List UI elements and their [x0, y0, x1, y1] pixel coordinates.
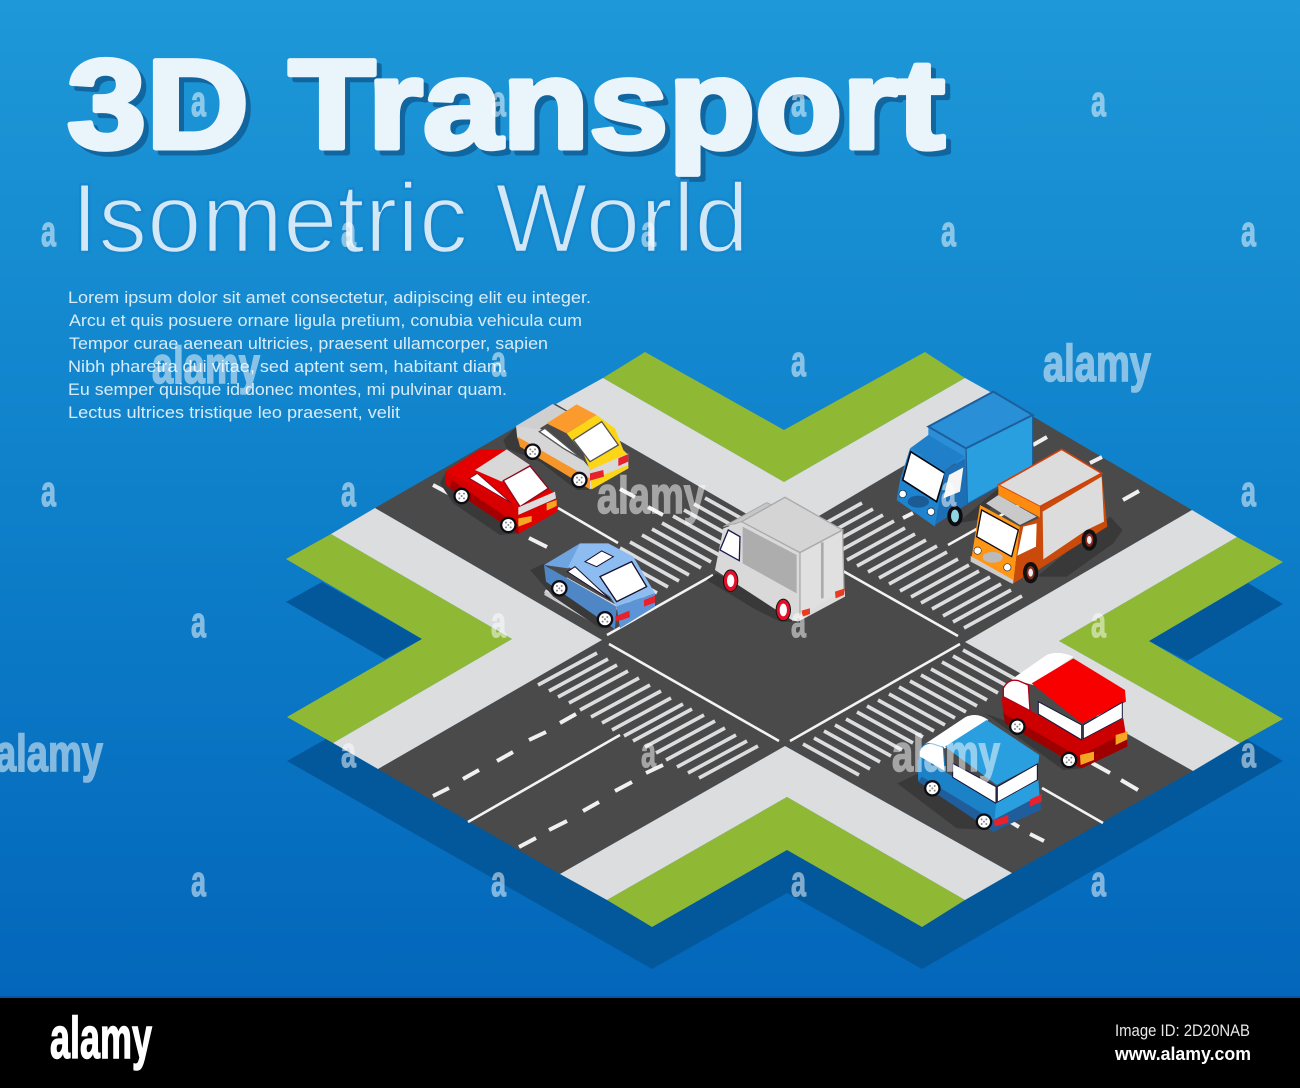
vehicle: blue truck	[897, 392, 1037, 527]
vehicle: blue car	[530, 543, 655, 629]
watermark: small letters: a	[1241, 207, 1256, 256]
stop lines and lane lines	[468, 499, 1103, 823]
vehicle: blue van	[897, 715, 1042, 832]
watermark: large alamy marks: alamy	[892, 725, 1000, 783]
crosswalk: north-east	[804, 503, 1022, 628]
watermark: large alamy marks: alamy	[152, 337, 260, 395]
watermark: small letters: a	[491, 77, 506, 126]
watermark: small letters: a	[1091, 77, 1106, 126]
watermark: small letters: a	[1091, 857, 1106, 906]
body text block: Arcu et quis posuere ornare ligula pretium, conubia vehicula cum	[69, 311, 582, 330]
watermark: small letters: a	[791, 857, 806, 906]
watermark: small letters: a	[641, 207, 656, 256]
body text block: Nibh pharetra dui vitae, sed aptent sem, habitant diam.	[68, 357, 507, 376]
body text block: Tempor curae aenean ultricies, praesent ullamcorper, sapien	[69, 334, 548, 353]
watermark: small letters: a	[1091, 598, 1106, 647]
watermark: small letters: a	[641, 728, 656, 777]
watermark: small letters: a	[41, 207, 56, 256]
vehicle: red van	[985, 653, 1127, 770]
footer bar	[0, 998, 1300, 1088]
body text block: Lorem ipsum dolor sit amet consectetur, adipiscing elit eu integer.	[68, 288, 591, 307]
watermark: small letters: a	[941, 207, 956, 256]
watermark: small letters: a	[491, 598, 506, 647]
subtitle: Isometric World: Isometric World	[71, 163, 749, 273]
website: www.alamy.com	[1114, 1044, 1251, 1064]
body text block: Eu semper quisque id donec montes, mi pulvinar quam.	[68, 380, 507, 399]
watermark: small letters: a	[191, 598, 206, 647]
isometric crossroads platform	[286, 352, 1283, 969]
watermark: small letters: a	[1241, 467, 1256, 516]
watermark: small letters: a	[191, 857, 206, 906]
watermark: small letters: a	[791, 337, 806, 386]
image id: Image ID: 2D20NAB	[1115, 1021, 1250, 1040]
watermark: large alamy marks: alamy	[597, 467, 705, 525]
title: 3D Transport: 3D Transport	[67, 33, 945, 175]
vehicle: yellow and orange car	[503, 404, 628, 490]
road surface	[375, 403, 1193, 874]
watermark: small letters: a	[341, 728, 356, 777]
body text block: Lectus ultrices tristique leo praesent, velit	[68, 403, 400, 422]
watermark: large alamy marks: alamy	[1043, 335, 1151, 393]
crosswalk: north-west	[545, 498, 764, 624]
watermark: small letters: a	[341, 207, 356, 256]
watermark: small letters	[41, 77, 1256, 906]
watermark: small letters: a	[791, 77, 806, 126]
watermark: large alamy marks	[0, 335, 1151, 783]
footer logo: alamy	[50, 1006, 152, 1071]
watermark: small letters: a	[191, 77, 206, 126]
crosswalk: south-west	[538, 653, 758, 778]
lane dashes	[433, 437, 1139, 847]
watermark: small letters: a	[491, 337, 506, 386]
watermark: small letters: a	[791, 598, 806, 647]
body text block	[68, 288, 591, 422]
watermark: small letters: a	[491, 857, 506, 906]
vehicle: red car	[440, 449, 557, 535]
sidewalks	[331, 378, 1240, 900]
vehicle: grey delivery truck	[707, 497, 845, 622]
crosswalk: south-east	[803, 650, 1019, 775]
watermark: small letters: a	[341, 467, 356, 516]
watermark: small letters: a	[1241, 728, 1256, 777]
vehicle: orange truck	[971, 449, 1123, 584]
watermark: small letters: a	[41, 467, 56, 516]
green lawns	[286, 352, 1283, 927]
watermark: small letters: a	[941, 467, 956, 516]
